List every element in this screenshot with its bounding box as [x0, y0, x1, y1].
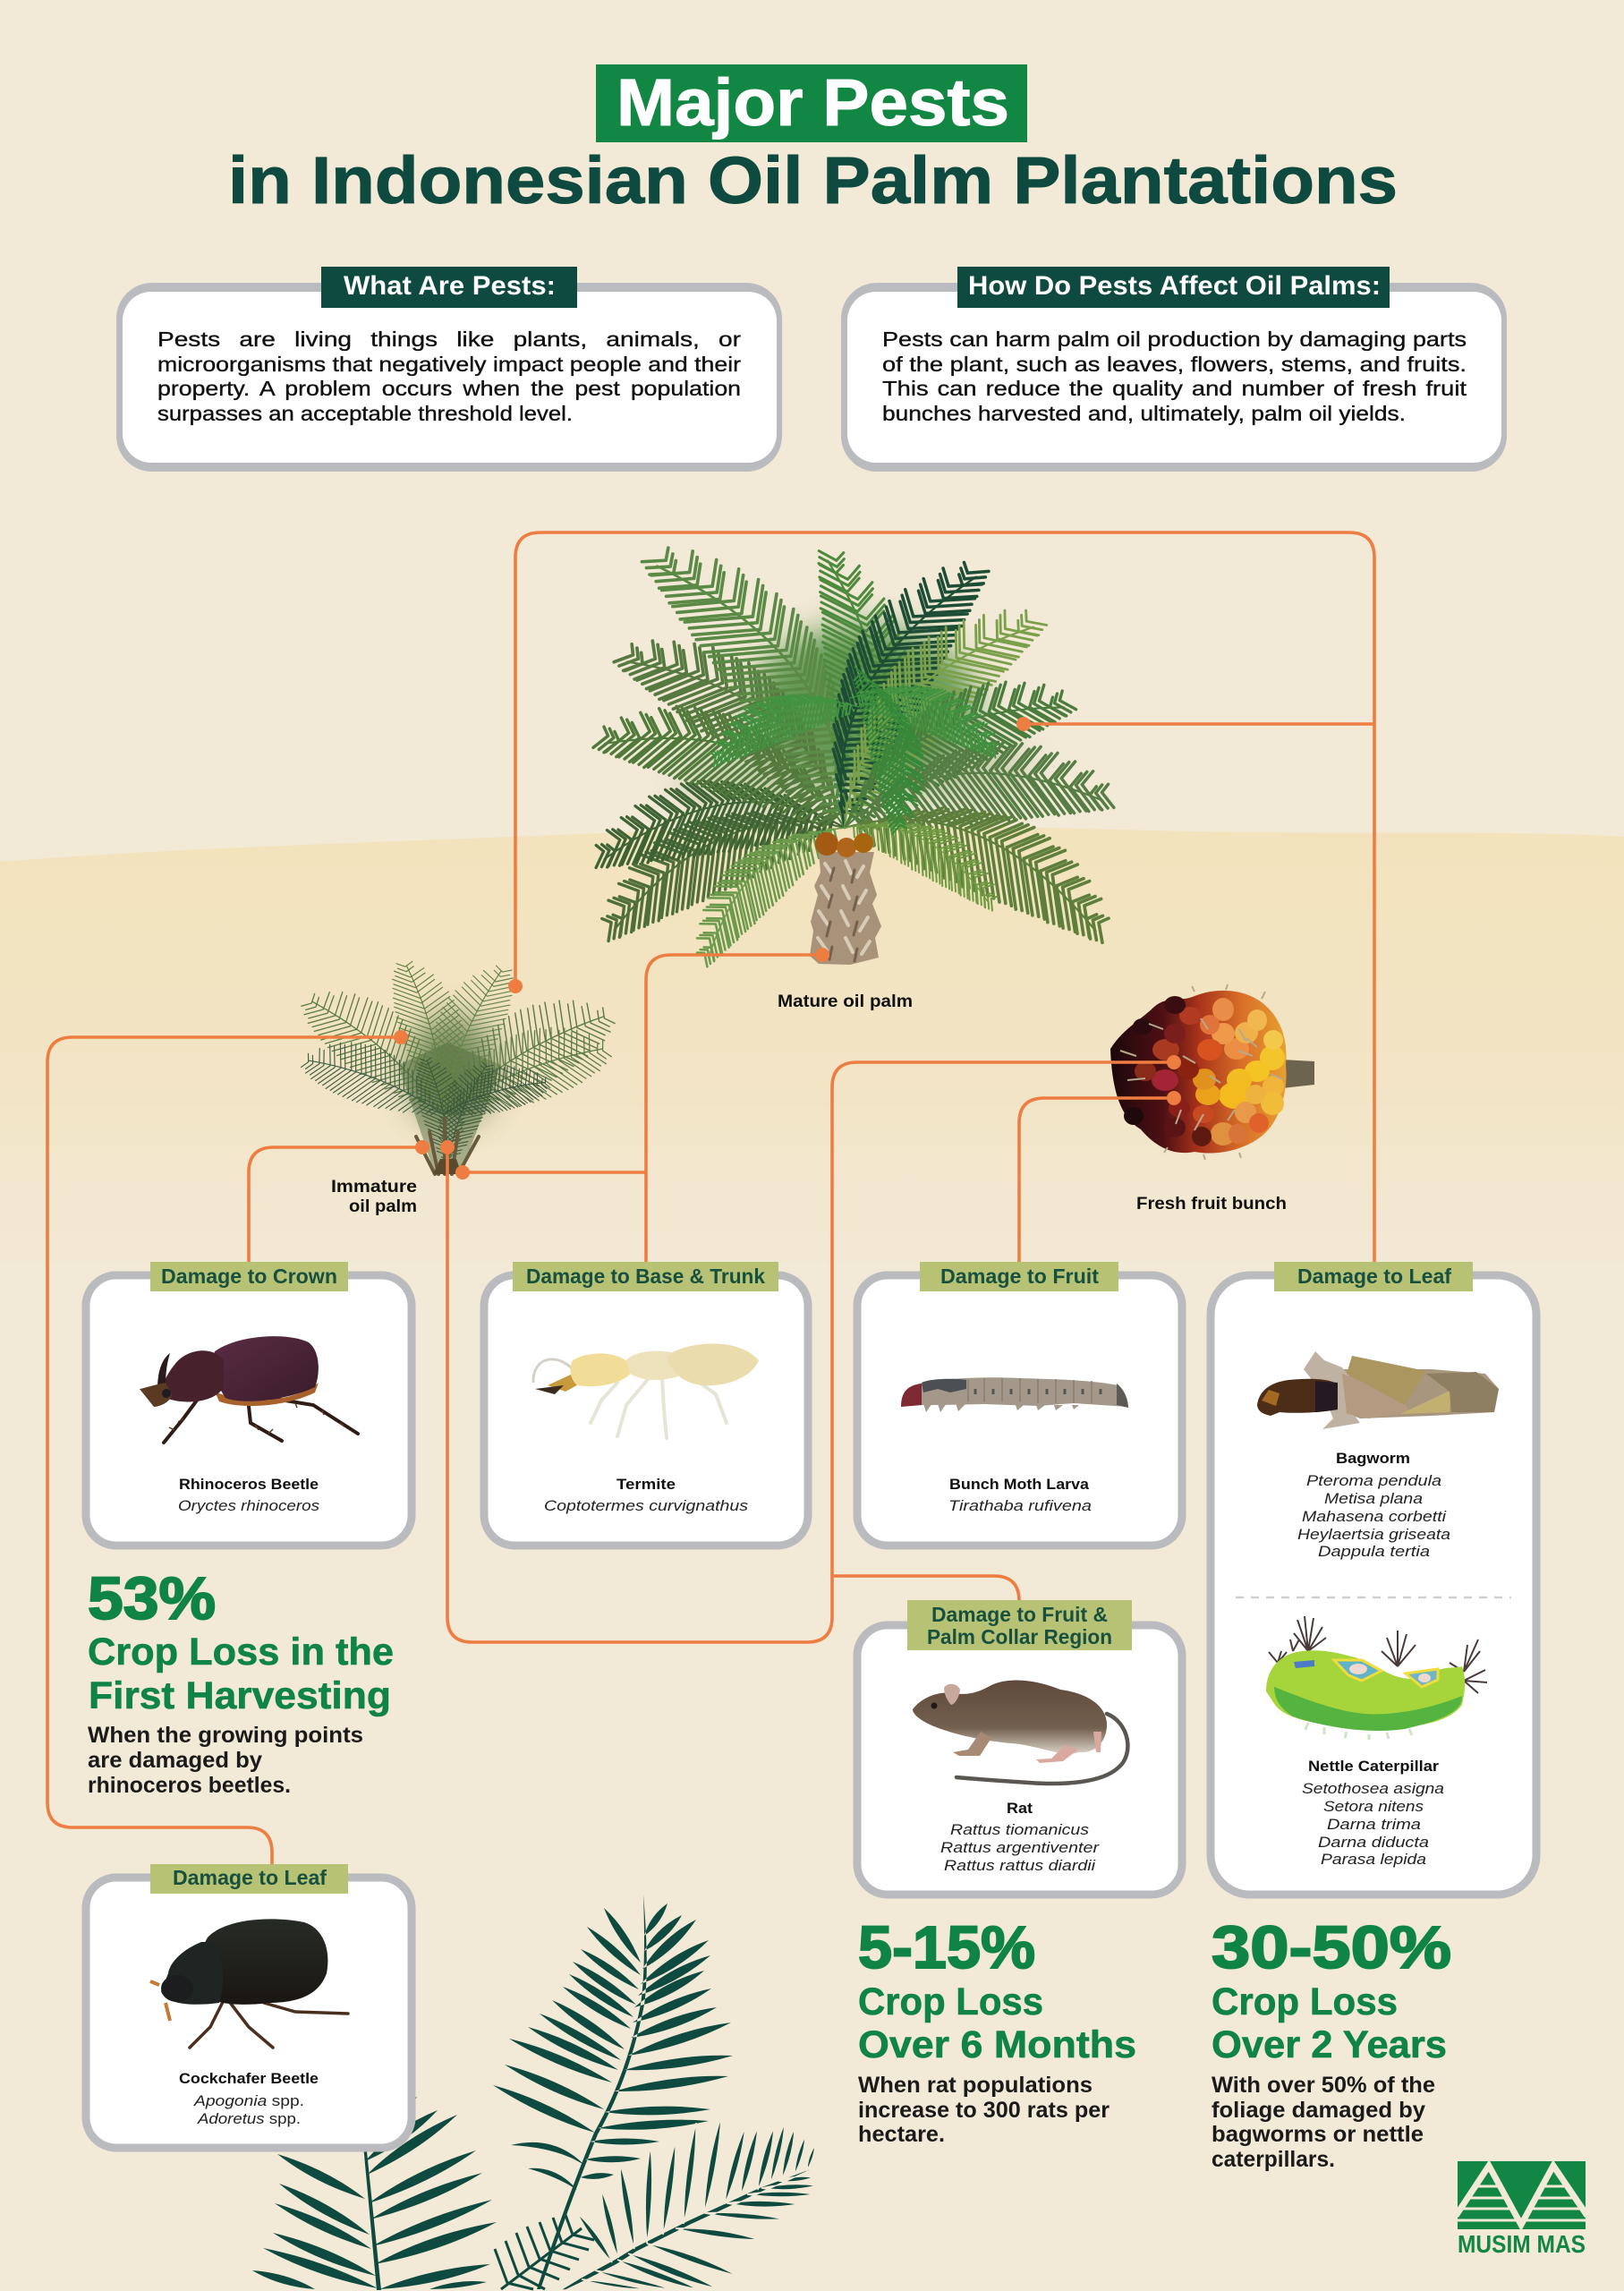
name: rhinoceros beetle: Rhinoceros Beetle [179, 1477, 319, 1493]
latin list: nettle caterpillar species: Darna diducta [1318, 1835, 1429, 1851]
latin list: bagworm species: Metisa plana [1324, 1491, 1423, 1507]
name: bunch moth larva: Bunch Moth Larva [949, 1477, 1090, 1493]
label: fresh fruit bunch: Fresh fruit bunch [1136, 1195, 1287, 1214]
text: how do pests affect: bunches harvested and, ultimately, palm oil yields. [882, 402, 1406, 425]
title line 1: Major Pests [616, 65, 1009, 140]
small bottom fern [495, 2215, 594, 2289]
tag: damage to crown [150, 1262, 348, 1291]
tag: damage to leaf right [1274, 1262, 1473, 1291]
immature oil palm illustration [296, 959, 620, 1174]
latin: oryctes rhinoceros: Oryctes rhinoceros [178, 1498, 319, 1514]
panel: how do pests affect oil palms: How Do Pests Affect Oil Palms: [968, 271, 1381, 301]
label: immature oil palm: oil palm [349, 1197, 417, 1216]
stat: 5-15 percent: Crop Loss [858, 1980, 1043, 2023]
immature palm stem base [416, 1119, 479, 1174]
latin list: cockchafer species: Adoretus spp. [197, 2111, 301, 2127]
latin list: bagworm species: Mahasena corbetti [1302, 1509, 1448, 1525]
connector lines [47, 532, 1374, 1870]
stat: 53 percent [88, 1565, 394, 1798]
latin list: rat species [940, 1822, 1101, 1874]
panel: what are pests: What Are Pests: [344, 271, 556, 301]
stat: 53 percent: First Harvesting [89, 1674, 391, 1717]
tag: damage to base and trunk [513, 1262, 778, 1291]
connector dots [394, 717, 1181, 1180]
panel: damage to fruit [857, 1262, 1182, 1546]
text: how do pests affect: of the plant, such as leaves, flowers, stems, and fruits. [882, 353, 1467, 376]
panel: what are pests [116, 267, 782, 472]
latin list: rat species: Rattus tiomanicus [950, 1822, 1089, 1838]
stat: 5-15 percent: hectare. [858, 2122, 945, 2147]
icon: cockchafer beetle [150, 1919, 348, 2048]
right lower fern [560, 2116, 826, 2290]
name: cockchafer beetle: Cockchafer Beetle [179, 2071, 319, 2087]
panel: damage to leaf right: Damage to Leaf [1297, 1265, 1451, 1288]
text: what are pests: microorganisms that negatively impact people and their [157, 353, 741, 376]
background hill band [0, 825, 1624, 1271]
panel: damage to leaf right [1211, 1262, 1536, 1895]
text: what are pests: property. A problem occurs when the pest population [157, 377, 741, 400]
stat: 30-50 percent: Over 2 Years [1212, 2023, 1447, 2066]
label: immature oil palm [331, 1178, 417, 1216]
stat: 53 percent: 53% [88, 1565, 216, 1632]
stat: 5-15 percent: Over 6 Months [858, 2023, 1136, 2066]
panel: damage to base and trunk [484, 1262, 808, 1546]
stat: 5-15 percent [858, 1914, 1136, 2147]
latin list: nettle caterpillar species: Setothosea asigna [1302, 1781, 1444, 1797]
latin list: nettle caterpillar species: Parasa lepida [1321, 1852, 1426, 1868]
icon: bunch moth larva [901, 1377, 1128, 1412]
logo: musim mas [1456, 2161, 1587, 2258]
logo: musim mas: MUSIM MAS [1458, 2230, 1586, 2258]
tag: damage to fruit and palm collar [907, 1600, 1132, 1650]
stat: 5-15 percent: increase to 300 rats per [858, 2098, 1110, 2123]
text: how do pests affect [882, 328, 1467, 425]
panel: damage to crown: Damage to Crown [161, 1265, 337, 1288]
label: mature oil palm: Mature oil palm [778, 992, 913, 1011]
label: immature oil palm: Immature [331, 1178, 417, 1197]
heading: what are pests [321, 267, 577, 308]
title line 2: in Indonesian Oil Palm Plantations [228, 143, 1398, 217]
text: how do pests affect: Pests can harm palm oil production by damaging parts [882, 328, 1467, 351]
latin list: bagworm species: Heylaertsia griseata [1297, 1527, 1450, 1543]
latin list: cockchafer species [193, 2093, 304, 2127]
stat: 53 percent: Crop Loss in the [88, 1631, 394, 1674]
fruit bunches on palm [815, 832, 838, 856]
text: what are pests: Pests are living things like plants, animals, or [157, 328, 741, 351]
mature oil palm illustration [585, 508, 1125, 967]
latin list: rat species: Rattus argentiventer [940, 1840, 1101, 1856]
latin: tirathaba rufivena: Tirathaba rufivena [948, 1498, 1092, 1514]
name: nettle caterpillar: Nettle Caterpillar [1308, 1759, 1440, 1775]
stat: 5-15 percent: When rat populations [858, 2073, 1093, 2098]
fresh fruit bunch illustration [1110, 984, 1314, 1160]
tag: damage to leaf left [150, 1864, 348, 1894]
stat: 5-15 percent: 5-15% [858, 1914, 1035, 1981]
title banner [596, 64, 1027, 142]
panel: damage to leaf left [86, 1864, 412, 2148]
stat: 30-50 percent: bagworms or nettle [1212, 2122, 1424, 2147]
text: how do pests affect: This can reduce the quality and number of fresh fruit [882, 377, 1467, 400]
panel: damage to fruit and palm collar: Palm Collar Region [927, 1625, 1112, 1648]
latin list: bagworm species: Pteroma pendula [1306, 1473, 1441, 1489]
trunk [810, 852, 881, 965]
icon: rhinoceros beetle [140, 1336, 358, 1443]
panel: damage to fruit and palm collar: Damage to Fruit & [931, 1603, 1108, 1626]
latin list: nettle caterpillar species: Setora nitens [1323, 1799, 1424, 1815]
icon: termite [533, 1343, 759, 1438]
left bottom fern [252, 2097, 497, 2290]
stat: 53 percent: When the growing points [88, 1723, 363, 1748]
icon: rat [913, 1681, 1127, 1784]
title [228, 64, 1398, 217]
stat: 30-50 percent: With over 50% of the [1212, 2073, 1435, 2098]
tag: damage to fruit [920, 1262, 1118, 1291]
stat: 30-50 percent: caterpillars. [1212, 2147, 1335, 2172]
panel: damage to fruit: Damage to Fruit [940, 1265, 1099, 1288]
stat: 30-50 percent: 30-50% [1212, 1914, 1451, 1981]
latin: coptotermes curvignathus: Coptotermes curvignathus [544, 1498, 748, 1514]
text: what are pests: surpasses an acceptable threshold level. [157, 402, 573, 425]
latin list: rat species: Rattus rattus diardii [944, 1858, 1097, 1874]
name: bagworm: Bagworm [1336, 1451, 1410, 1467]
name: rat: Rat [1007, 1801, 1033, 1817]
latin list: cockchafer species: Apogonia spp. [193, 2093, 304, 2109]
heading: how do pests affect [957, 267, 1390, 308]
panel: damage to crown [86, 1262, 412, 1546]
stat: 30-50 percent [1212, 1914, 1451, 2172]
latin list: nettle caterpillar species [1302, 1781, 1444, 1868]
fruit stem [1282, 1060, 1314, 1088]
decorative fern fronds [252, 1895, 826, 2290]
stat: 53 percent: are damaged by [88, 1748, 262, 1773]
latin list: bagworm species [1297, 1473, 1450, 1560]
stat: 30-50 percent: Crop Loss [1212, 1980, 1398, 2023]
panel: how do pests affect oil palms [841, 267, 1507, 472]
name: termite: Termite [616, 1477, 676, 1493]
stat: 30-50 percent: foliage damaged by [1212, 2098, 1425, 2123]
center large fern [493, 1895, 733, 2289]
latin list: bagworm species: Dappula tertia [1318, 1544, 1430, 1560]
panel: damage to leaf left: Damage to Leaf [173, 1866, 327, 1889]
latin list: nettle caterpillar species: Darna trima [1327, 1817, 1421, 1833]
panel: damage to fruit and palm collar [857, 1600, 1182, 1895]
icon: bagworm [1257, 1351, 1499, 1429]
text: what are pests [157, 328, 741, 425]
panel: damage to base and trunk: Damage to Base & Trunk [526, 1265, 765, 1288]
stat: 53 percent: rhinoceros beetles. [88, 1773, 291, 1798]
icon: nettle caterpillar [1266, 1616, 1487, 1740]
